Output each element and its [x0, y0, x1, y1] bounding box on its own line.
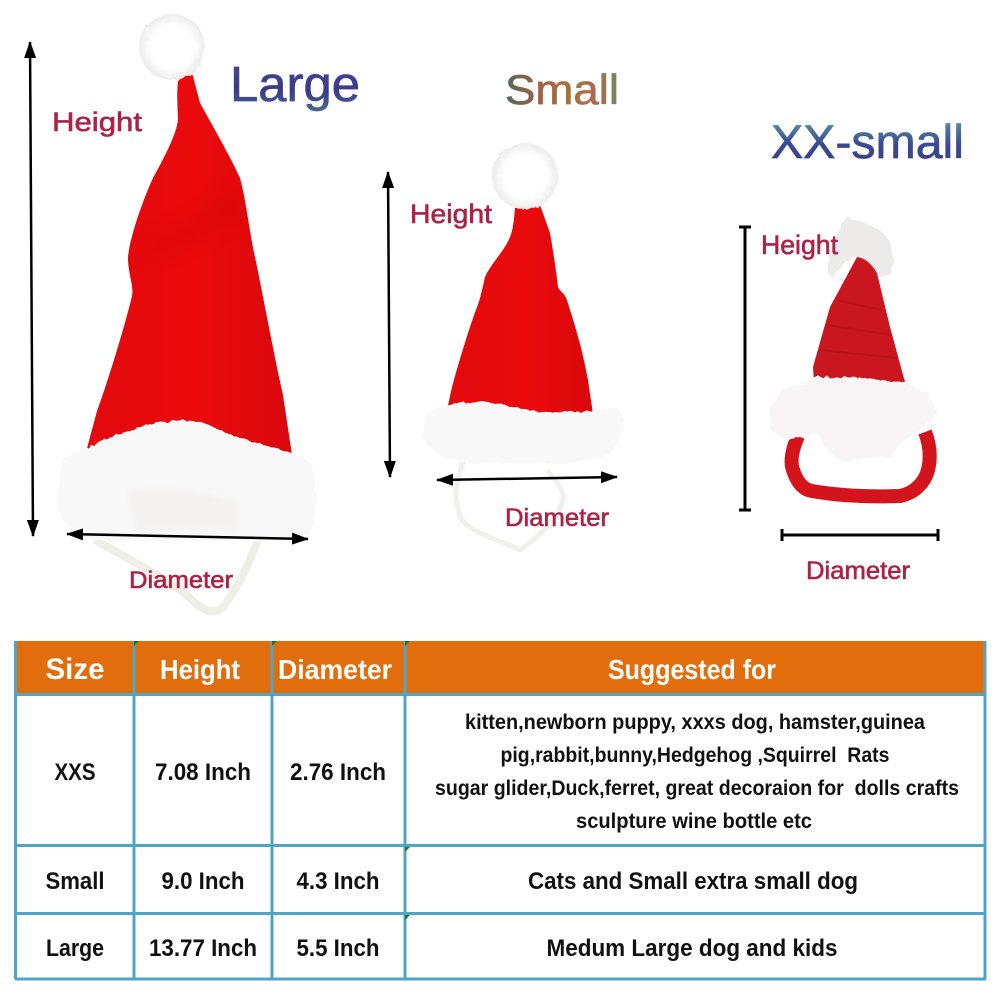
label: xx-small diameter: Diameter [806, 557, 910, 585]
row: XXS: kitten,newborn puppy, xxxs dog, hamster,guinea [465, 711, 925, 734]
label: large diameter: Diameter [129, 567, 233, 594]
row: Small: 4.3 Inch [296, 868, 380, 895]
elastic band [792, 432, 930, 496]
xx-small hat [770, 218, 938, 496]
label: large height: Height [52, 107, 143, 137]
row: Small: Small [46, 868, 104, 895]
heading: Small: Small [505, 66, 619, 113]
cell corner marks [134, 641, 410, 920]
row: Small: Cats and Small extra small dog [528, 868, 858, 895]
arrow: small diameter [437, 477, 617, 480]
brim inner [128, 490, 237, 530]
header row [46, 653, 776, 686]
hat cone [813, 257, 905, 382]
small hat [422, 143, 623, 550]
strap [95, 540, 258, 611]
heading: Large: Large [230, 58, 360, 112]
row: Large: Large [46, 935, 104, 962]
row: XXS: pig,rabbit,bunny,Hedgehog ,Squirrel Rats [500, 744, 890, 767]
size table [15, 641, 986, 979]
row: Large: 5.5 Inch [296, 935, 380, 962]
pompom [139, 14, 205, 80]
bracket: xx-small height [739, 227, 751, 510]
header row: Diameter [278, 654, 392, 685]
row: Small [46, 868, 858, 895]
pompom [492, 143, 558, 209]
row: XXS: 2.76 Inch [290, 759, 386, 786]
arrow: small height [388, 172, 390, 477]
table header band [15, 641, 985, 694]
hat body [447, 205, 593, 414]
table grid [15, 641, 986, 979]
hat brim [770, 377, 938, 462]
row: XXS: sugar glider,Duck,ferret, great decoraion for dolls crafts [435, 777, 959, 800]
row: Small: 9.0 Inch [162, 868, 244, 895]
label: xx-small height: Height [761, 230, 838, 260]
pompom [827, 218, 893, 277]
header row: Suggested for [608, 654, 776, 685]
bracket: xx-small diameter [782, 529, 938, 541]
row: XXS [54, 711, 959, 833]
arrow: large diameter [67, 534, 308, 539]
row: XXS: sculpture wine bottle etc [576, 810, 812, 833]
label: small height: Height [410, 199, 493, 229]
hat brim [57, 420, 315, 541]
header row: Height [160, 654, 240, 685]
label: small diameter: Diameter [505, 504, 609, 532]
large hat [57, 14, 315, 611]
fold shadow [140, 190, 240, 255]
arrow: large height [30, 42, 33, 536]
cone stripes [820, 300, 898, 358]
row: XXS: XXS [54, 759, 96, 786]
header row: Size [46, 653, 104, 686]
row: XXS: 7.08 Inch [155, 759, 251, 786]
strap [456, 457, 563, 550]
row: Large: Medum Large dog and kids [546, 935, 838, 962]
row: Large [46, 935, 838, 962]
hat brim [422, 402, 623, 463]
heading: XX-small: XX-small [771, 115, 964, 168]
hat body [86, 63, 292, 455]
row: Large: 13.77 Inch [149, 935, 257, 962]
